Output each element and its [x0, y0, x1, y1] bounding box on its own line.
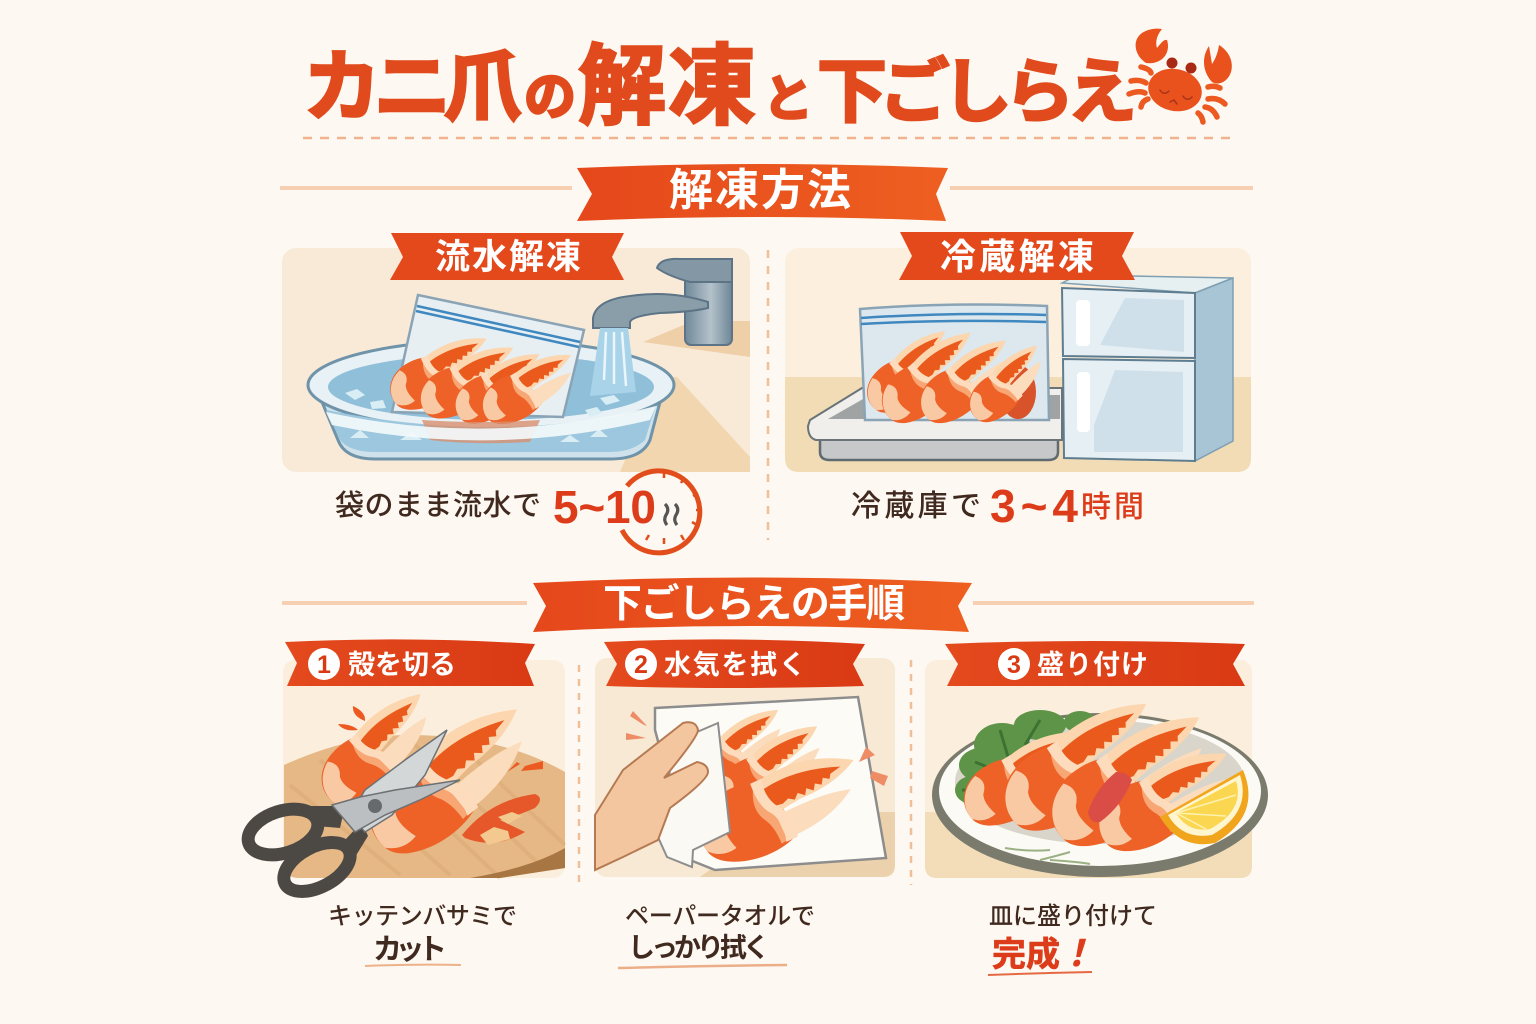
crab claws — [679, 688, 871, 885]
title: 下ごしらえ — [817, 53, 1137, 131]
caption: step 3 — [988, 903, 1157, 975]
section heading: 下ごしらえの手順: 下ごしらえの手順 — [603, 583, 905, 626]
lettuce — [955, 710, 1096, 804]
section heading: 下ごしらえの手順 — [282, 578, 1254, 632]
caption: 冷蔵解凍 time: 冷蔵庫で — [851, 490, 981, 523]
ribbon: 流水解凍 — [390, 233, 624, 280]
panel: 冷蔵解凍 — [785, 248, 1251, 472]
caption: step 1 — [328, 903, 517, 966]
icon: metal tray — [808, 388, 1062, 460]
crab claws — [951, 669, 1243, 871]
caption: 冷蔵解凍 time: 時間 — [1081, 491, 1144, 524]
icon: scissors — [242, 730, 460, 902]
caption: step 3: 完成 — [992, 936, 1060, 974]
cutting board — [284, 735, 565, 878]
plate — [932, 713, 1268, 877]
icon: crab — [1129, 29, 1232, 122]
caption: 流水解凍 time: 袋のまま流水で — [335, 489, 541, 522]
lemon wedge — [1160, 770, 1248, 844]
paper towel — [655, 697, 886, 870]
panel: 流水解凍 — [282, 248, 750, 472]
panel: step 1 — [242, 660, 565, 902]
caption: step 2: ペーパータオルで — [625, 903, 815, 930]
caption: 冷蔵解凍 time: 3~4 — [990, 480, 1078, 532]
title — [303, 37, 1137, 136]
icon: running water — [590, 328, 636, 396]
ribbon: 冷蔵解凍 — [899, 232, 1135, 280]
caption: 冷蔵解凍 time — [851, 480, 1144, 532]
ribbon: step 1: 殻を切る — [348, 650, 456, 680]
ribbon: step 3: 3 — [1007, 651, 1021, 679]
ribbon: step 2: 水気を拭く — [664, 650, 806, 680]
caption: step 3: ！ — [1058, 933, 1094, 974]
caption: step 1: キッテンバサミで — [328, 903, 517, 930]
caption: step 2 — [618, 903, 815, 968]
ribbon: 流水解凍: 流水解凍 — [435, 238, 581, 277]
caption: step 1: カット — [373, 934, 447, 966]
title: 解凍 — [578, 37, 756, 136]
ribbon: step 1 — [285, 639, 535, 686]
ribbon: 冷蔵解凍: 冷蔵解凍 — [940, 236, 1094, 277]
ribbon: step 1: 1 — [317, 651, 331, 679]
panel: step 3 — [925, 660, 1268, 878]
ribbon: step 3 — [945, 641, 1245, 686]
icon: timer — [622, 471, 702, 553]
icon: hand — [595, 722, 708, 870]
ribbon: step 2: 2 — [634, 651, 648, 679]
icon: zip bag with claws — [326, 295, 656, 443]
crab claws — [310, 671, 542, 877]
section heading: 解凍方法 — [280, 164, 1253, 221]
ribbon: step 2 — [604, 639, 865, 688]
title: の — [524, 69, 576, 127]
panel: step 2 — [595, 658, 895, 885]
icon: zip bag with claws — [858, 305, 1051, 437]
ribbon: step 3: 盛り付け — [1037, 650, 1148, 680]
folded towel — [658, 723, 730, 867]
icon: refrigerator — [1062, 275, 1233, 461]
icon: basin with water — [308, 340, 674, 459]
caption: step 3: 皿に盛り付けて — [989, 903, 1157, 930]
title: と — [763, 71, 813, 127]
accent marks — [338, 706, 543, 772]
section heading: 解凍方法: 解凍方法 — [669, 166, 851, 215]
title: カニ爪 — [303, 43, 522, 131]
icon: faucet — [593, 259, 732, 345]
caption: step 2: しっかり拭く — [628, 933, 770, 963]
caption: 流水解凍 time — [335, 471, 702, 553]
accent marks — [626, 711, 888, 786]
caption: 流水解凍 time: 5~10 — [553, 481, 656, 533]
